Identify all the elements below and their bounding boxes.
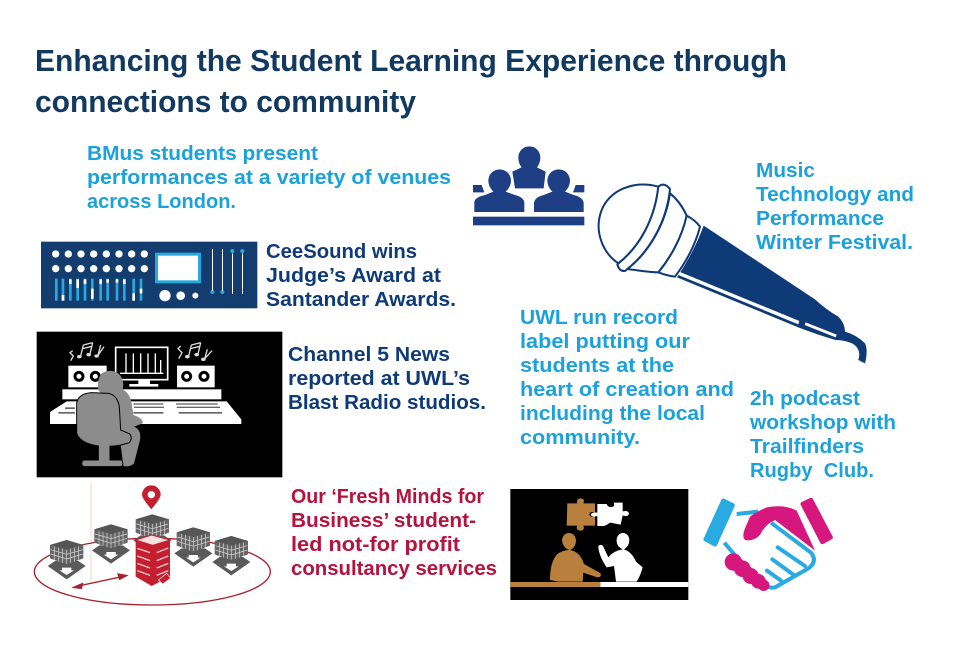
pink hand — [743, 506, 815, 551]
icon: mixing desk — [41, 242, 257, 308]
icon: handshake — [706, 500, 831, 591]
text: Music Technology festival: Performance — [756, 207, 884, 230]
text: UWL record label: UWL run record — [520, 306, 678, 329]
text: podcast workshop — [749, 387, 896, 482]
text: Channel 5 News — [288, 343, 486, 414]
red building — [136, 535, 171, 586]
title: connections to community — [35, 84, 417, 119]
text: podcast workshop: Trailfinders — [750, 435, 864, 458]
text: Fresh Minds for Business — [291, 485, 497, 580]
text: Music Technology festival: Winter Festival. — [756, 231, 913, 254]
text: Channel 5 News: reported at UWL’s — [288, 367, 470, 390]
text: UWL record label: including the local — [520, 402, 705, 425]
text: Fresh Minds for Business: Business’ student- — [291, 509, 476, 532]
text: podcast workshop: Rugby Club. — [750, 459, 874, 482]
text: BMus venues: across London. — [87, 190, 236, 213]
text: UWL record label: community. — [520, 426, 640, 449]
text: BMus venues: BMus students present — [87, 142, 318, 165]
text: Music Technology festival: Music — [756, 159, 815, 182]
pink fingers — [725, 553, 769, 591]
text: Channel 5 News: Channel 5 News — [288, 343, 450, 366]
mic head — [599, 185, 700, 277]
mic handle — [677, 226, 867, 363]
text: UWL record label: students at the — [520, 354, 674, 377]
text: BMus venues: performances at a variety of venues — [87, 166, 451, 189]
puzzle pieces — [567, 498, 595, 531]
console — [62, 389, 221, 399]
music notes — [70, 343, 212, 361]
text: BMus venues — [87, 142, 451, 213]
text: CeeSound award — [266, 240, 456, 311]
icon: city consultancy map — [34, 483, 270, 605]
blue hand — [766, 523, 814, 588]
icon: microphone — [599, 185, 867, 363]
left person — [550, 533, 601, 582]
text: CeeSound award: CeeSound wins — [266, 240, 417, 263]
text: podcast workshop: workshop with — [749, 411, 896, 434]
blue cuff and wrist — [706, 501, 733, 544]
double arrow — [72, 573, 128, 589]
text: Channel 5 News: Blast Radio studios. — [288, 391, 486, 414]
text: CeeSound award: Santander Awards. — [266, 288, 456, 311]
text: UWL record label: heart of creation and — [520, 378, 734, 401]
text: UWL record label: label putting our — [520, 330, 690, 353]
title: Enhancing the Student Learning Experience through — [35, 43, 787, 78]
text: Music Technology festival: Technology and — [756, 183, 914, 206]
title — [35, 43, 787, 119]
speakers — [68, 366, 107, 387]
monitor — [116, 347, 168, 380]
text: Music Technology festival — [756, 159, 914, 254]
text: Fresh Minds for Business: led not-for profit — [291, 533, 460, 556]
text: Fresh Minds for Business: consultancy services — [291, 557, 497, 580]
icon: puzzle collaboration — [510, 489, 688, 600]
icon: radio studio — [37, 332, 282, 477]
seated person — [77, 371, 143, 467]
icon: audience — [473, 146, 584, 225]
pink cuff — [803, 500, 831, 542]
text: podcast workshop: 2h podcast — [750, 387, 860, 410]
right person — [598, 533, 643, 582]
text: UWL record label — [520, 306, 734, 449]
text: CeeSound award: Judge’s Award at — [266, 264, 441, 287]
map pin — [142, 485, 161, 509]
table — [510, 582, 600, 587]
text: Fresh Minds for Business: Our ‘Fresh Minds for — [291, 485, 484, 508]
